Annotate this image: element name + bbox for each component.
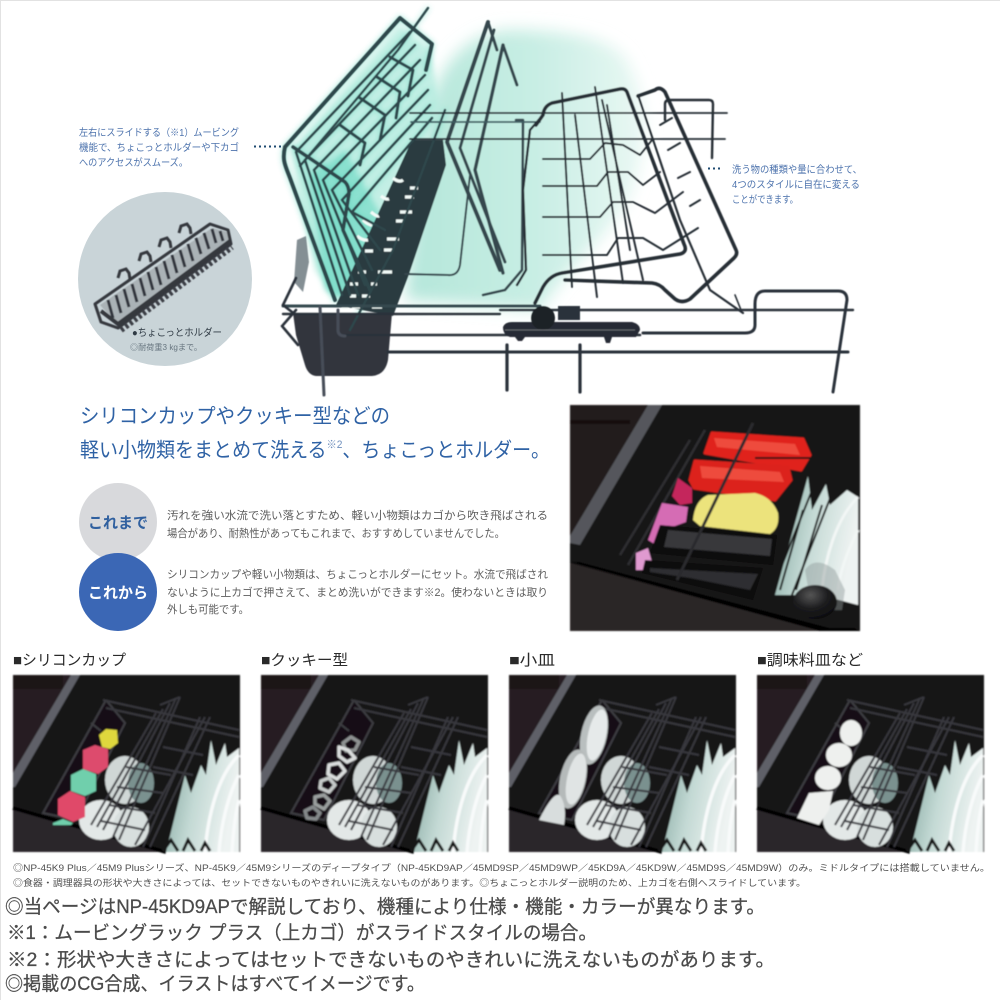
holder load note: ◎耐荷重3 kgまで。 [130, 342, 202, 352]
heading: シリコンカップやクッキー型などの [80, 405, 390, 428]
label: seasoning plates: ■調味料皿など [757, 652, 863, 669]
heading [80, 405, 550, 462]
callout: moving function: 左右にスライドする（※1）ムービング [79, 126, 239, 139]
after description: 外しも可能です。 [167, 602, 249, 616]
badge: after [79, 553, 157, 631]
footnotes: ※1：ムービングラック プラス（上カゴ）がスライドスタイルの場合。 [7, 922, 597, 944]
plates [775, 476, 858, 605]
holder wire in photo [620, 430, 705, 565]
measuring cup and black ball [793, 562, 845, 619]
heading: 軽い小物類をまとめて洗える [80, 439, 346, 462]
before description: 汚れを強い水流で洗い落とすため、軽い小物類はカゴから吹き飛ばされる [167, 508, 548, 522]
red containers [690, 433, 810, 500]
thin center rack [405, 22, 523, 295]
small holder basket inside the rack [293, 140, 446, 376]
panel: holder product circle [78, 192, 252, 366]
holder name: ●ちょこっとホルダー [132, 326, 222, 339]
badge: before: これまで [88, 514, 148, 532]
before description [167, 508, 548, 540]
left rack glow [284, 8, 445, 330]
fine print [13, 862, 990, 888]
center wire [677, 423, 753, 580]
cutters [305, 737, 359, 819]
photo: cookie cutters [261, 675, 488, 852]
label: small plate: ■小皿 [509, 652, 555, 669]
after description: ないように上カゴで押さえて、まとめ洗いができます※2。使わないときは取り [167, 585, 548, 599]
after description [167, 567, 548, 616]
footnotes: ◎当ページはNP-45KD9APで解説しており、機種により仕様・機能・カラーが異なります。 [5, 896, 765, 918]
fine print: ◎食器・調理器具の形状や大きさによっては、セットできないものやきれいに洗えないものがあります。◎ちょこっとホルダー説明のため、上カゴを右側へスライドしています。 [13, 877, 806, 888]
panel: after [79, 553, 548, 631]
callout: four styles: ことができます。 [732, 193, 798, 206]
before description: 場合があり、耐熱性があってもこれまで、おすすめしていませんでした。 [167, 526, 505, 540]
after description: シリコンカップや軽い小物類は、ちょこっとホルダーにセット。水流で飛ばされ [167, 567, 548, 581]
photo: holder in use with red, yellow and black items [570, 405, 860, 631]
footnotes [5, 896, 775, 995]
callout: moving function [79, 126, 281, 169]
callout: four styles: 洗う物の種類や量に合わせて、 [732, 163, 862, 176]
badge: after: これから [88, 584, 148, 602]
callout: moving function: 機能で、ちょこっとホルダーや下カゴ [79, 141, 239, 154]
callout: four styles: 4つのスタイルに自在に変える [732, 178, 860, 191]
dishes [797, 720, 862, 825]
right rack wire frame [410, 87, 743, 313]
heading: ※2 [327, 439, 342, 451]
panel: before [79, 483, 548, 561]
badge: before [79, 483, 157, 561]
photo: small plates [509, 675, 736, 852]
fine print: ◎NP-45K9 Plus／45M9 Plusシリーズ、NP-45K9／45M9シリーズのディープタイプ（NP-45KD9AP／45MD9SP／45MD9WP／45KD9A／45KD9W／45MD9S／45MD9W）のみ。ミドルタイプには搭載していません。 [13, 862, 990, 873]
callout: moving function: へのアクセスがスムーズ。 [79, 156, 188, 169]
slide mechanism and roller [503, 306, 640, 343]
callout: four styles [708, 163, 862, 206]
icon: holder basket [95, 224, 232, 330]
left rack wire frame [284, 8, 445, 330]
heading: 、ちょこっとホルダー。 [342, 439, 550, 462]
yellow container [693, 493, 778, 534]
plates [539, 703, 613, 825]
footnotes: ※2：形状や大きさによってはセットできないものやきれいに洗えないものがあります。 [7, 949, 775, 971]
pink cups [636, 478, 692, 570]
photo: silicone cups [13, 675, 240, 852]
black containers [642, 525, 777, 600]
cups [53, 729, 118, 825]
label: silicone cup: ■シリコンカップ [13, 652, 126, 669]
label: cookie cutter: ■クッキー型 [261, 652, 348, 669]
lower rack rails and legs [282, 278, 853, 395]
hero: slide rack illustration [282, 8, 853, 395]
footnotes: ◎掲載のCG合成、イラストはすべてイメージです。 [5, 973, 425, 995]
photo: seasoning plates [757, 675, 984, 852]
teal water haze [290, 25, 644, 310]
